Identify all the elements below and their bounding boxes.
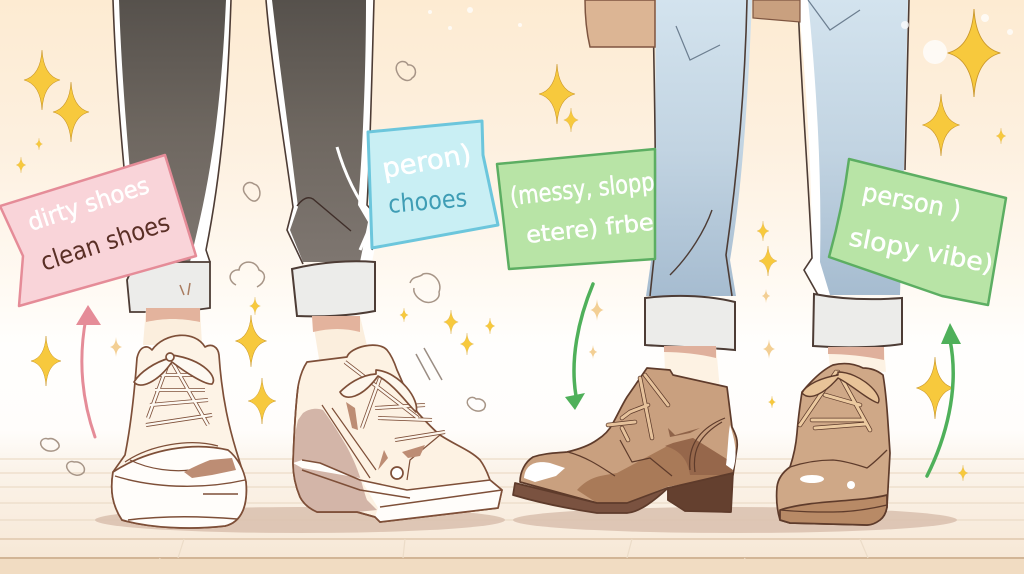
wooden floor — [0, 459, 1024, 574]
brown shoe left — [513, 368, 737, 513]
green label text: messy sloppy: (messy, slopp — [509, 167, 656, 211]
green label text: etere frbe: etere) frbe — [525, 210, 655, 249]
pink label text: dirty shoes: dirty shoes — [24, 171, 153, 237]
dust puffs — [41, 61, 485, 475]
green label text: slopy vibe: slopy vibe) — [847, 222, 996, 279]
left dark leg — [113, 0, 231, 262]
ankle skin right pair — [664, 346, 886, 390]
white sneaker left — [112, 335, 246, 528]
bokeh dots — [428, 7, 1013, 64]
sparkles gold — [16, 9, 1006, 481]
right dark leg — [266, 0, 380, 264]
pink label text: clean shoes: clean shoes — [37, 208, 173, 277]
white sneaker right — [293, 345, 502, 522]
left dark leg cuff — [127, 262, 210, 312]
ankle skin left pair — [143, 308, 368, 365]
light jeans left cuff — [645, 296, 735, 350]
tan bag — [585, 0, 655, 47]
pink label — [0, 155, 196, 306]
light jeans right cuff — [813, 294, 902, 347]
blue note text: chooes: chooes — [387, 183, 468, 219]
blue note text: peron): peron) — [380, 139, 474, 185]
green label left — [497, 149, 656, 269]
motion lines — [416, 348, 442, 380]
green label text: person: person ) — [860, 177, 964, 225]
brown shoe right — [777, 364, 890, 525]
tan bag right part — [753, 0, 800, 22]
light jeans left leg — [646, 0, 752, 296]
green label right — [829, 159, 1006, 305]
right dark leg cuff — [292, 261, 375, 316]
arrow green up — [927, 323, 961, 476]
dirty marks on cuff — [180, 283, 190, 295]
blue note — [368, 121, 498, 248]
sparkles pale — [110, 289, 775, 359]
arrow pink up — [76, 305, 101, 437]
floor shadows — [95, 507, 957, 533]
light jeans right leg — [798, 0, 909, 295]
arrow green down — [565, 284, 593, 410]
